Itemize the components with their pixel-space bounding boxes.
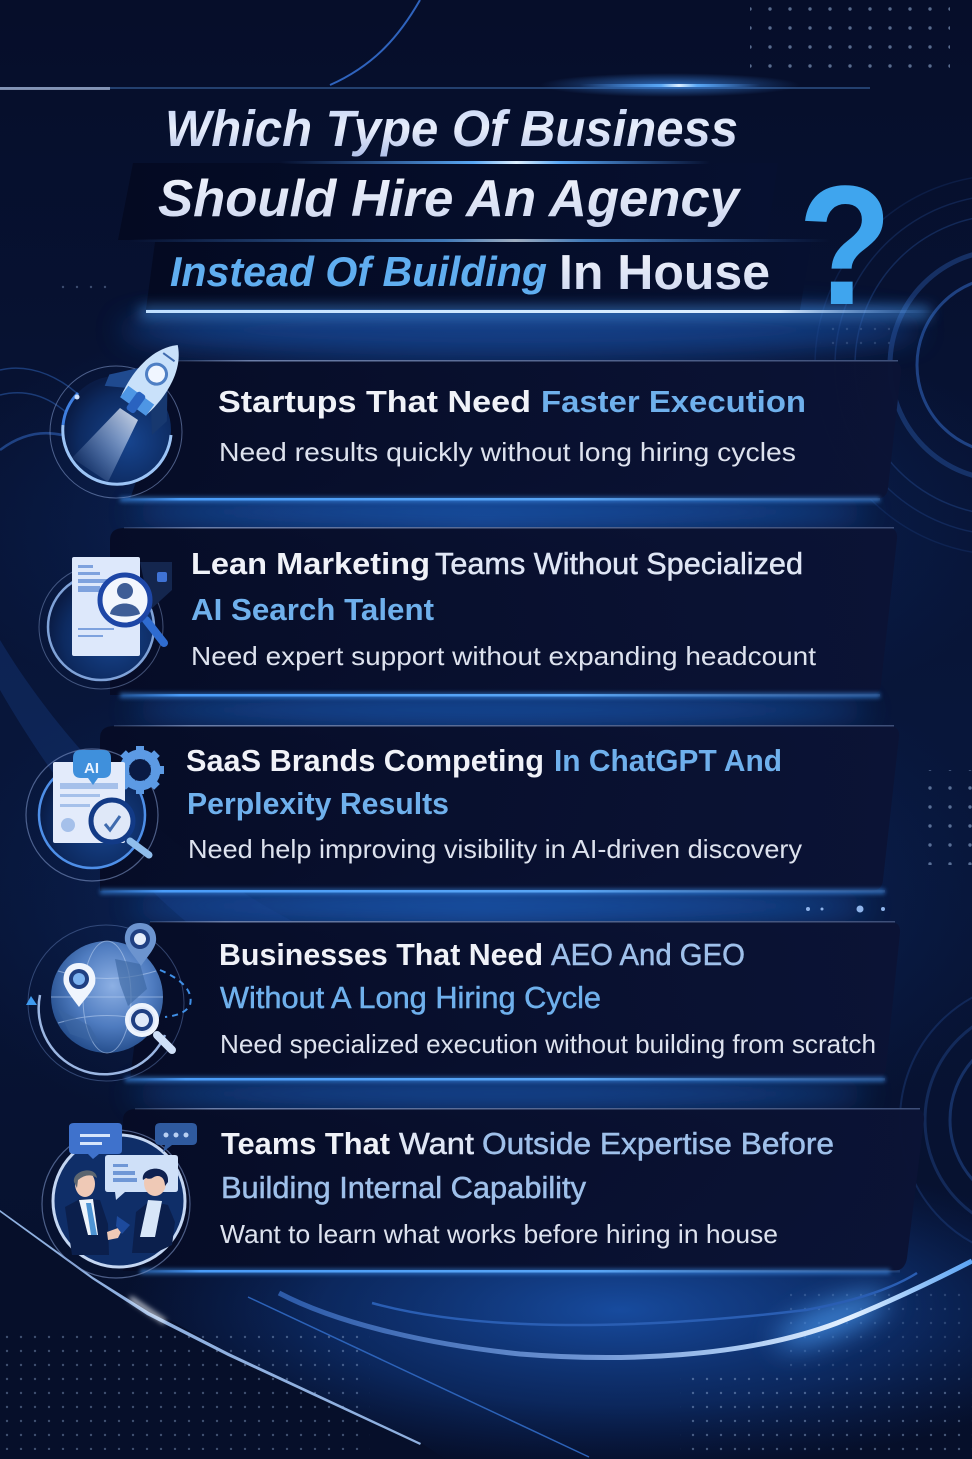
title line three: In House [559,246,770,300]
person left [65,1170,109,1255]
icon: rocket [50,323,207,498]
heading highlight second line: Building Internal Capability [221,1170,586,1205]
panel 1: startups [120,360,901,502]
dark lower left wedge [0,1210,445,1459]
main title [118,100,936,341]
title line one: Which Type Of Business [165,100,738,157]
heading highlight: Outside Expertise Before [482,1126,834,1161]
speech bubble dots [155,1123,197,1152]
person right [107,1169,175,1253]
panel 3: saas brands [100,725,899,894]
heading continued: Teams Without Specialized [435,546,803,581]
heading highlight: Faster Execution [541,384,806,419]
title bar: line two [118,163,778,240]
description: Need expert support without expanding headcount [191,641,817,671]
map pin left [64,963,95,1007]
heading: Teams That [221,1126,390,1161]
icon: AI document with gear [26,746,164,881]
question mark: ? [798,151,892,341]
description: Need specialized execution without building from scratch [220,1029,876,1059]
icon: AI document with gear: AI [84,760,99,777]
speech bubble light [105,1155,178,1200]
heading highlight: In ChatGPT And [554,743,782,778]
heading: Startups That Need [218,384,531,419]
title line two: Should Hire An Agency [158,170,742,228]
panel 2: lean marketing teams [110,527,897,698]
heading: Businesses That Need [219,937,543,972]
gear [116,746,164,794]
heading highlight: AI Search Talent [191,592,434,627]
title line three highlight: Instead Of Building [170,248,547,295]
heading highlight: AEO And GEO [551,937,745,972]
panel 4: businesses [125,921,900,1082]
top line and bottom swooshes [0,87,870,89]
heading continued: Want [399,1126,474,1161]
heading highlight second line: Perplexity Results [187,786,449,821]
panel 5: teams [123,1108,924,1274]
description: Need results quickly without long hiring cycles [219,437,796,467]
heading: SaaS Brands Competing [186,743,544,778]
heading highlight second line: Without A Long Hiring Cycle [220,980,601,1015]
icon: two consultants talking [42,1123,197,1278]
description: Want to learn what works before hiring in house [220,1219,778,1249]
icon: document and magnifier [39,557,172,689]
icon: globe with pins [26,923,191,1081]
speech bubble blue [69,1123,122,1159]
heading: Lean Marketing [191,546,430,581]
description: Need help improving visibility in AI-driven discovery [188,834,802,864]
map pin right [125,923,156,966]
title bar: line three [146,238,812,310]
